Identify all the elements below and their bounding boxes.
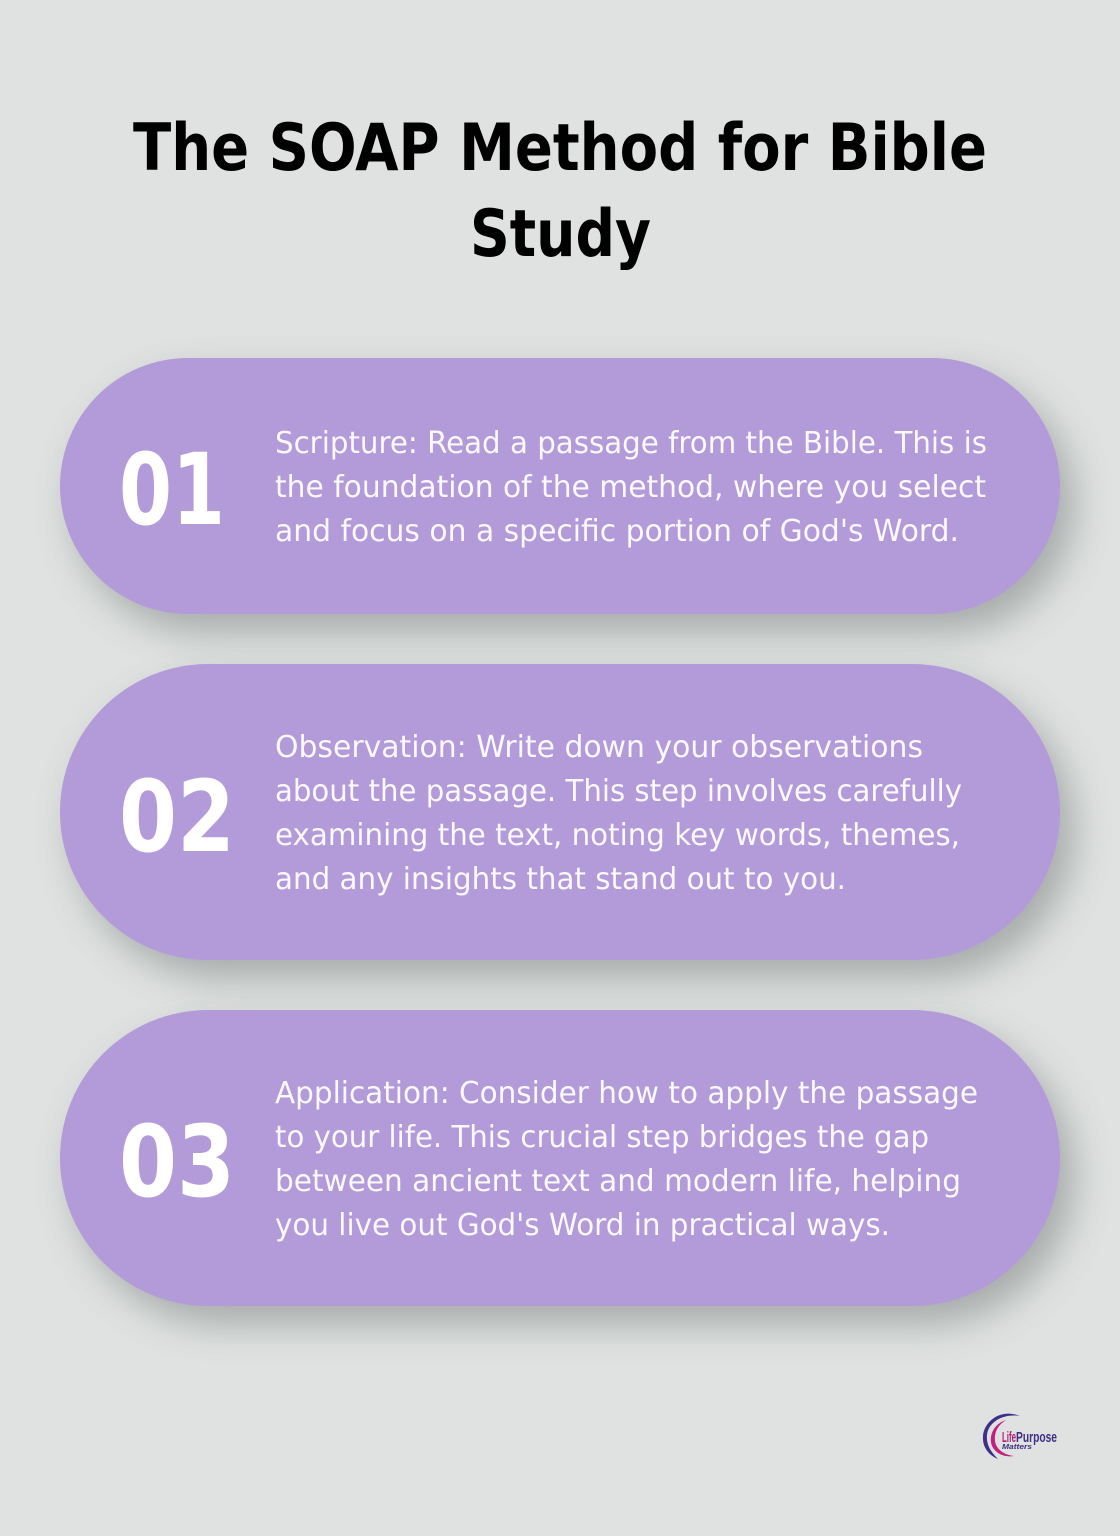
step 3 text: Application: Consider how to apply the passage (275, 1076, 978, 1111)
step 3 text: to your life. This crucial step bridges the gap (275, 1120, 929, 1155)
panel: step 3 background (60, 1010, 1060, 1306)
title (133, 111, 987, 272)
step 2 number: 02 (119, 760, 235, 875)
step 2 text: about the passage. This step involves carefully (275, 774, 962, 809)
step 3 text: you live out God's Word in practical ways. (275, 1208, 890, 1243)
step 3 text: between ancient text and modern life, helping (275, 1164, 961, 1199)
step 1 text: Scripture: Read a passage from the Bible. This is (275, 426, 987, 461)
panel: step 1 background (60, 358, 1060, 614)
step 2 text: examining the text, noting key words, themes, (275, 818, 960, 853)
step 1 number: 01 (119, 433, 225, 548)
step 2 text (275, 730, 962, 897)
logo: Life Purpose Matters: Purpose (1016, 1429, 1057, 1446)
logo: Life Purpose Matters (983, 1414, 1057, 1459)
step 1 text: and focus on a specific portion of God's Word. (275, 514, 959, 549)
step 1 text: the foundation of the method, where you select (275, 470, 986, 505)
step 3 text (275, 1076, 978, 1243)
panel: step 2 background (60, 664, 1060, 960)
step 2 text: Observation: Write down your observations (275, 730, 923, 765)
step 3 number: 03 (119, 1105, 235, 1220)
step 2 text: and any insights that stand out to you. (275, 862, 846, 897)
logo: Life Purpose Matters: Matters (1002, 1444, 1032, 1451)
title: Study (470, 197, 651, 272)
logo: Life Purpose Matters: Life (1002, 1429, 1016, 1446)
title: The SOAP Method for Bible (133, 111, 987, 186)
step 1 text (275, 426, 987, 549)
